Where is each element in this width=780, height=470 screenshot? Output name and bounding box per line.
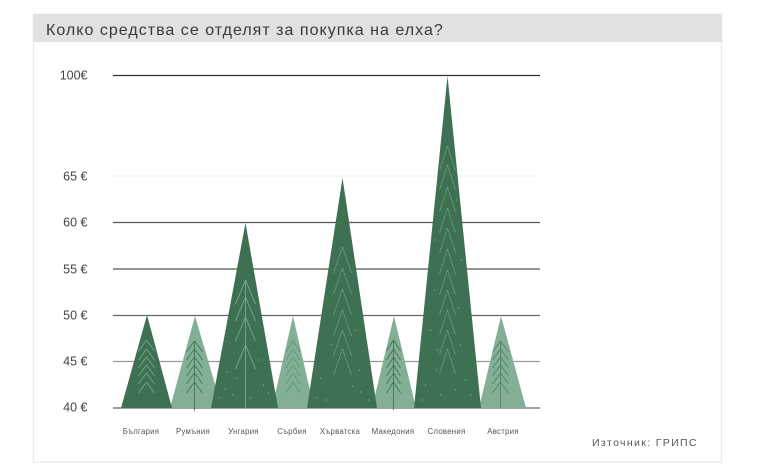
- tree: Македония 50 €: [372, 316, 416, 410]
- tree: Словения 100 €: [414, 76, 481, 408]
- x axis labels: Хърватска: [320, 427, 360, 436]
- x axis labels: Унгария: [228, 427, 259, 436]
- tree: Австрия 50 €: [479, 316, 526, 408]
- x axis labels: Сърбия: [277, 427, 307, 436]
- y axis labels: 100€: [60, 68, 88, 82]
- x axis labels: Румъния: [176, 427, 210, 436]
- heading: title bar: Колко средства се отделят за покупка на елха?: [46, 22, 444, 39]
- y axis labels: 45 €: [63, 354, 88, 368]
- y axis labels: 40 €: [63, 400, 88, 414]
- source note: Източник: ГРИПС: [592, 437, 698, 449]
- y axis labels: 60 €: [63, 216, 88, 230]
- y axis labels: 55 €: [63, 262, 88, 276]
- y axis labels: 65 €: [63, 170, 88, 184]
- x axis labels: Словения: [428, 427, 465, 436]
- tree: Унгария 60 €: [211, 223, 278, 408]
- chart: tree bars: [121, 76, 526, 411]
- x axis labels: Австрия: [487, 427, 519, 436]
- tree: Хърватска 65 €: [307, 178, 377, 408]
- tree: Сърбия 50 €: [272, 316, 314, 408]
- tree: Румъния 50 €: [170, 316, 222, 411]
- tree: България 50 €: [121, 315, 172, 408]
- x axis labels: Македония: [372, 427, 414, 436]
- heading: title bar: [33, 14, 722, 42]
- speckles on dark trees: [219, 200, 471, 400]
- x axis labels: България: [123, 427, 159, 436]
- grid lines: [113, 76, 540, 408]
- y axis labels: [60, 68, 88, 414]
- y axis labels: 50 €: [63, 308, 88, 322]
- x axis labels: [123, 427, 519, 436]
